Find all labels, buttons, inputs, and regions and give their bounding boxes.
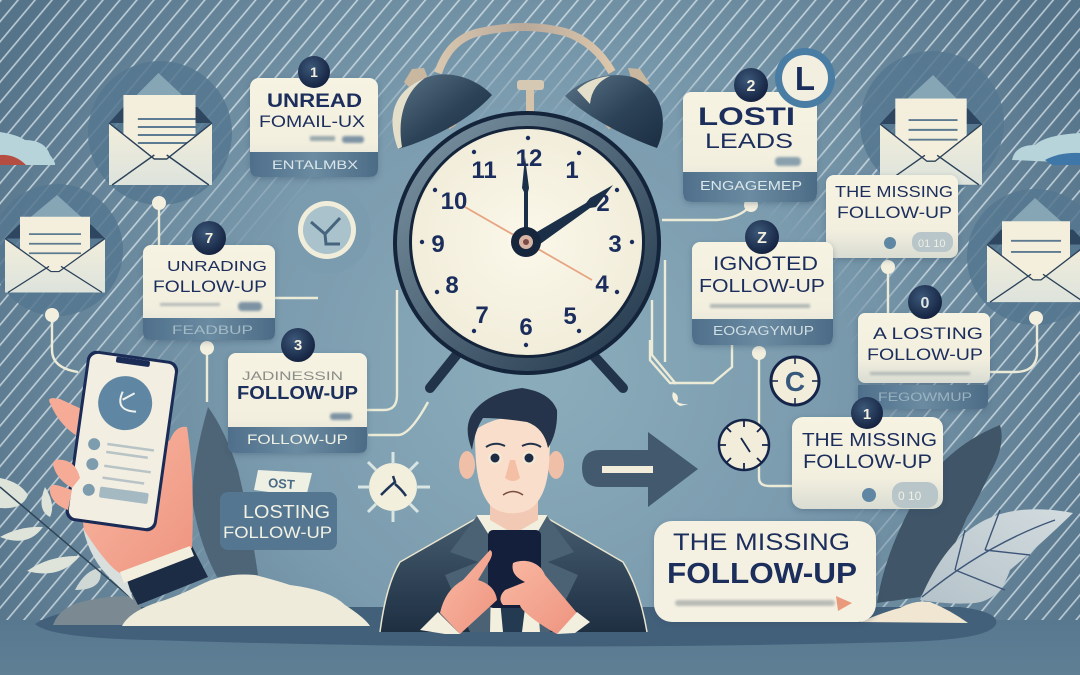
badge: 2: 2 — [747, 78, 756, 95]
icon: small clock — [719, 420, 769, 470]
icon: envelope mid left — [0, 184, 123, 316]
badge: Z: Z — [757, 230, 767, 247]
band label: ENTALMBX — [272, 158, 358, 172]
neck — [490, 500, 538, 534]
numerals: 10 — [441, 188, 467, 215]
badge: 3: 3 — [294, 337, 302, 354]
cuffs — [420, 612, 460, 634]
bell supports — [447, 118, 612, 127]
icon: sun emblem — [358, 452, 430, 522]
subheading: fomail: FOMAIL-UX — [259, 112, 365, 131]
card: a losting follow-up — [858, 313, 990, 409]
left hand — [440, 550, 497, 634]
badge: 7: 7 — [205, 230, 213, 247]
subheading: follow-up: FOLLOW-UP — [153, 277, 267, 296]
progress smudge — [675, 600, 835, 606]
heading: a losting: A LOSTING — [873, 324, 983, 343]
eyes — [488, 452, 502, 464]
badge: 0 — [908, 285, 942, 319]
subheading: follow-up: FOLLOW-UP — [237, 383, 358, 403]
numerals: 2 — [596, 190, 610, 217]
numerals: 9 — [431, 231, 445, 258]
icon: dark leaf behind card — [193, 407, 258, 577]
body — [380, 518, 647, 632]
badge: Z — [745, 220, 779, 254]
card: ignoted follow-up — [692, 242, 833, 345]
ears — [459, 451, 475, 479]
badge: L emblem — [775, 48, 835, 108]
badge: 7 — [192, 221, 226, 255]
subheading: follow-up: FOLLOW-UP — [223, 523, 332, 542]
card: lost leads — [683, 92, 817, 202]
badge: 1: 1 — [310, 64, 318, 80]
minute hand — [522, 157, 529, 240]
badge: 1 lower — [851, 397, 883, 429]
legs — [430, 353, 458, 388]
band label: EOGAGYMUP — [713, 324, 814, 338]
numerals — [431, 145, 622, 341]
band label: ENGAGEMEP — [700, 178, 802, 193]
badge: L emblem: L — [795, 60, 815, 97]
heading: lost: LOSTI — [698, 103, 795, 131]
face — [412, 129, 642, 355]
leaves: bottom left — [0, 478, 130, 597]
pill label: 0 10 — [898, 489, 922, 503]
subheading: leads: LEADS — [705, 130, 793, 153]
subheading: follow-up: FOLLOW-UP — [803, 452, 932, 473]
icon: hand holding phone — [49, 349, 208, 605]
subheading: follow-up: FOLLOW-UP — [867, 345, 983, 364]
badge: 1 lower: 1 — [863, 406, 871, 423]
right hand — [500, 561, 577, 634]
heading: the missing: THE MISSING — [673, 529, 850, 556]
mound: snow right — [860, 602, 968, 623]
thumb fingers — [53, 460, 80, 488]
subheading: follow-up: FOLLOW-UP — [699, 275, 825, 296]
connector dots — [45, 196, 1043, 406]
numerals: 7 — [475, 302, 489, 329]
brows — [486, 444, 541, 447]
numerals: 5 — [563, 303, 577, 330]
icon: light leaf right — [920, 509, 1073, 604]
icon: envelope mid right — [967, 189, 1080, 325]
numerals: 3 — [608, 231, 622, 258]
numerals: 6 — [519, 314, 533, 341]
icon: round emblem left of clock — [283, 186, 371, 274]
heading: unrading: UNRADING — [167, 259, 267, 275]
card: the missing follow-up top — [826, 175, 958, 258]
numerals: 11 — [471, 157, 497, 184]
icon: clock C — [771, 357, 819, 405]
lapels — [445, 516, 492, 632]
numerals: 8 — [445, 272, 459, 299]
heading: the missing: THE MISSING — [802, 430, 937, 450]
band label: FEGOWMUP — [878, 390, 972, 404]
icon: alarm clock — [392, 27, 663, 388]
card: the missing follow-up middle — [792, 417, 943, 509]
icon: envelope top right — [860, 51, 1004, 195]
heading: the missing: THE MISSING — [835, 184, 953, 201]
hour dots — [420, 136, 634, 347]
subheading: follow-up: FOLLOW-UP — [837, 203, 952, 222]
arrow — [582, 432, 698, 507]
badge: 1 — [298, 56, 330, 88]
person — [380, 388, 647, 634]
cloud: right — [1012, 133, 1080, 165]
shirt — [477, 515, 547, 632]
hair — [468, 388, 557, 450]
right bell — [565, 68, 663, 148]
nose — [505, 460, 520, 481]
back finger — [49, 398, 88, 440]
numerals: 12 — [516, 145, 542, 172]
knob — [517, 80, 544, 112]
floor shadow — [35, 607, 996, 647]
numerals: 1 — [565, 157, 579, 184]
heading: ignoted: IGNOTED — [713, 254, 818, 275]
tie — [500, 600, 526, 632]
phone — [64, 349, 179, 533]
heading: unread: UNREAD — [267, 91, 362, 112]
hub — [511, 227, 541, 257]
second hand — [465, 207, 592, 280]
card: losting follow-up dark — [220, 492, 337, 550]
subheading: follow-up: FOLLOW-UP — [667, 558, 857, 590]
badge: 3 — [281, 328, 315, 362]
head — [475, 418, 550, 513]
mound: snow left — [122, 574, 370, 626]
note: sticky tag — [254, 470, 312, 497]
mound: grey — [53, 596, 150, 625]
pill label: 01 10 — [918, 238, 946, 250]
shirt — [83, 528, 133, 600]
numerals: 4 — [595, 271, 609, 298]
heading: jadinessin: JADINESSIN — [242, 369, 343, 383]
band label: FOLLOW-UP — [247, 431, 348, 447]
icon: dark leaf right — [877, 425, 1002, 603]
connector lines — [52, 203, 1037, 486]
heading: losting: LOSTING — [243, 502, 330, 522]
icon: clock C: C — [785, 366, 805, 397]
note: sticky tag: OST — [268, 475, 295, 492]
phone — [488, 530, 541, 608]
card: unread — [250, 78, 378, 177]
card: unrading follow-up — [143, 245, 275, 340]
badge: 0: 0 — [921, 295, 930, 312]
hour hand — [530, 185, 613, 247]
badge: 2 — [734, 68, 768, 102]
card: the missing follow-up main — [654, 521, 876, 622]
body — [393, 111, 661, 375]
left bell — [392, 68, 492, 149]
cloud: left — [0, 132, 55, 165]
icon: envelope top left — [88, 61, 232, 205]
band label: FEADBUP — [172, 323, 253, 337]
card: missin follow-up — [228, 353, 367, 453]
sleeve — [120, 546, 208, 605]
cuff — [120, 546, 194, 583]
mouth — [503, 492, 523, 495]
handle — [438, 27, 612, 73]
palm — [80, 427, 193, 574]
